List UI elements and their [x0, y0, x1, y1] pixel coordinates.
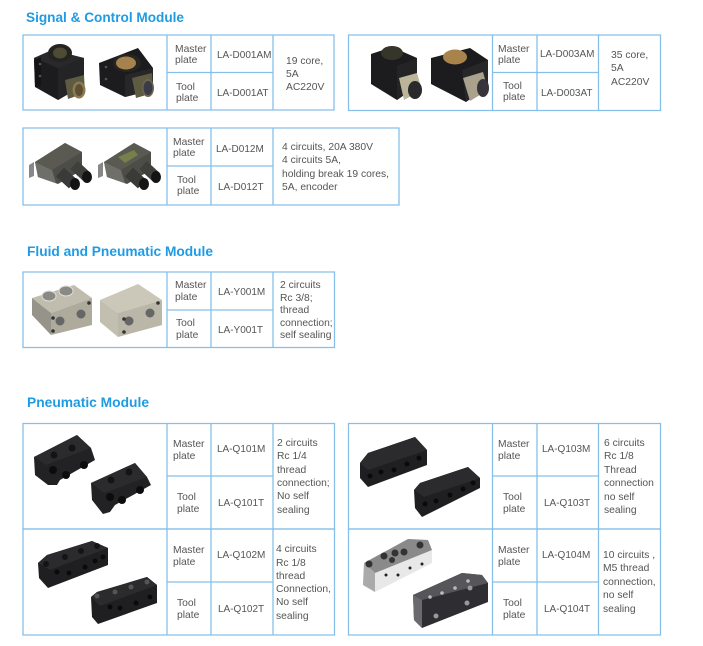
text: D012 labels: 4 circuits, 20A 380V: [282, 142, 373, 153]
text: Y001 labels: Tool: [176, 318, 195, 329]
text: D012 labels: holding break 19 cores,: [282, 169, 389, 180]
text: D003 labels: [498, 44, 649, 103]
text: Q102 labels: 4 circuits: [276, 544, 317, 555]
text: D012 labels: plate: [173, 148, 196, 159]
text: Q101 labels: LA-Q101M: [217, 444, 265, 455]
icon: Y001 tool block: [100, 284, 162, 337]
icon: Q102 master block: [38, 541, 108, 588]
text: Y001 labels: LA-Y001M: [218, 287, 265, 298]
text: D012 labels: Tool: [177, 175, 196, 186]
text: Y001 labels: LA-Y001T: [218, 325, 263, 336]
text: D001 labels: Master: [175, 44, 207, 55]
text: Y001 labels: Master: [175, 280, 207, 291]
text: Q103 labels: no self: [604, 492, 634, 503]
text: Q103 labels: LA-Q103M: [542, 444, 590, 455]
text: Q104 labels: no self: [603, 590, 633, 601]
icon: Q102 tool block: [91, 577, 157, 624]
text: Q103 labels: sealing: [604, 505, 637, 516]
text: Q101 labels: No self: [277, 491, 309, 502]
text: D003 labels: plate: [498, 55, 521, 66]
icon: Q101 master block: [34, 435, 95, 485]
text: Q103 labels: 6 circuits: [604, 438, 645, 449]
text: Q102 labels: sealing: [276, 611, 309, 622]
text: Q102 labels: [173, 544, 331, 622]
text: Q101 labels: connection;: [277, 478, 330, 489]
text: D003 labels: LA-D003AT: [541, 88, 593, 99]
heading: Pneumatic Module: Pneumatic Module: [27, 394, 149, 410]
text: D003 labels: 35 core,: [611, 50, 648, 61]
text: Q102 labels: Rc 1/8: [276, 558, 306, 569]
text: Q101 labels: LA-Q101T: [218, 498, 264, 509]
text: Q103 labels: Thread: [604, 465, 637, 476]
panel: LA-D003: [348, 35, 660, 110]
text: D001 labels: LA-D001AT: [217, 88, 269, 99]
text: Q102 labels: plate: [173, 557, 196, 568]
text: Y001 labels: Rc 3/8;: [280, 293, 313, 304]
text: Y001 labels: plate: [176, 330, 199, 341]
text: Q103 labels: LA-Q103T: [544, 498, 590, 509]
text: D012 labels: 5A, encoder: [282, 182, 338, 193]
text: D012 labels: 4 circuits 5A,: [282, 155, 341, 166]
text: Q101 labels: plate: [177, 504, 200, 515]
panel: LA-D012: [23, 128, 399, 205]
icon: Q103 master block: [360, 437, 427, 487]
panel: LA-D001: [23, 35, 334, 110]
text: Q104 labels: LA-Q104M: [542, 550, 590, 561]
text: Q103 labels: Rc 1/8: [604, 451, 634, 462]
text: D012 labels: LA-D012M: [216, 144, 264, 155]
text: D003 labels: plate: [503, 92, 526, 103]
text: Q104 labels: plate: [498, 557, 521, 568]
text: D003 labels: AC220V: [611, 77, 649, 88]
text: Q101 labels: Master: [173, 439, 205, 450]
text: D001 labels: [175, 44, 324, 104]
text: Q103 labels: Tool: [503, 492, 522, 503]
text: D001 labels: Tool: [176, 82, 195, 93]
icon: Y001 master block: [32, 285, 92, 335]
text: Q101 labels: [173, 438, 330, 516]
text: Q104 labels: sealing: [603, 604, 636, 615]
text: Q102 labels: Tool: [177, 598, 196, 609]
panel: LA-Y001: [23, 272, 334, 348]
text: D003 labels: LA-D003AM: [540, 49, 594, 60]
text: D003 labels: Master: [498, 44, 530, 55]
text: D003 labels: 5A: [611, 63, 624, 74]
icon: D012 tool connector: [98, 143, 161, 190]
panel: LA-Q102: [23, 529, 334, 635]
text: Q103 labels: Master: [498, 439, 530, 450]
text: Q104 labels: plate: [503, 610, 526, 621]
text: Q104 labels: [498, 545, 656, 621]
icon: D001 master connector: [34, 44, 86, 100]
text: D001 labels: AC220V: [286, 82, 324, 93]
text: Q102 labels: Connection,: [276, 584, 331, 595]
text: Q101 labels: thread: [277, 465, 306, 476]
text: Q101 labels: Tool: [177, 492, 196, 503]
panel: LA-Q101: [23, 424, 334, 529]
text: Q101 labels: Rc 1/4: [277, 451, 307, 462]
text: Q104 labels: M5 thread: [603, 563, 650, 574]
text: D001 labels: plate: [175, 55, 198, 66]
icon: D001 tool connector: [99, 48, 154, 98]
text: Q104 labels: 10 circuits ,: [603, 550, 655, 561]
text: D012 labels: plate: [177, 186, 200, 197]
text: Y001 labels: self sealing: [280, 330, 332, 341]
text: Q103 labels: [498, 438, 654, 516]
heading: Signal & Control Module: Signal & Control Module: [26, 9, 184, 25]
icon: Q104 master block: [363, 539, 432, 592]
text: Q103 labels: plate: [503, 504, 526, 515]
heading: Fluid and Pneumatic Module: Fluid and Pneumatic Module: [27, 243, 213, 259]
panel: LA-Q103: [348, 424, 660, 529]
text: D012 labels: [173, 137, 389, 197]
text: D003 labels: Tool: [503, 81, 522, 92]
text: Q104 labels: Tool: [503, 598, 522, 609]
text: Y001 labels: plate: [175, 292, 198, 303]
text: D012 labels: Master: [173, 137, 205, 148]
icon: Q103 tool block: [414, 467, 480, 517]
icon: D012 master connector: [29, 143, 92, 190]
text: Q102 labels: LA-Q102T: [218, 604, 264, 615]
text: Q104 labels: connection,: [603, 577, 656, 588]
text: Q104 labels: LA-Q104T: [544, 604, 590, 615]
text: D001 labels: plate: [176, 93, 199, 104]
icon: Q101 tool block: [91, 463, 151, 514]
text: Q102 labels: No self: [276, 597, 308, 608]
text: Q102 labels: plate: [177, 610, 200, 621]
icon: D003 master connector: [371, 46, 422, 100]
text: Q102 labels: thread: [276, 571, 305, 582]
text: Q101 labels: plate: [173, 451, 196, 462]
text: Y001 labels: thread: [280, 305, 309, 316]
text: Q101 labels: 2 circuits: [277, 438, 318, 449]
text: Q103 labels: plate: [498, 451, 521, 462]
text: Y001 labels: 2 circuits: [280, 280, 321, 291]
text: Q101 labels: sealing: [277, 505, 310, 516]
text: Q103 labels: connection: [604, 478, 654, 489]
text: D001 labels: 5A: [286, 69, 299, 80]
text: Q104 labels: Master: [498, 545, 530, 556]
text: Q102 labels: Master: [173, 545, 205, 556]
text: Y001 labels: connection;: [280, 318, 333, 329]
icon: D003 tool connector: [431, 48, 489, 102]
icon: Q104 tool block: [413, 573, 488, 628]
text: D001 labels: LA-D001AM: [217, 50, 271, 61]
text: D012 labels: LA-D012T: [218, 182, 264, 193]
text: Q102 labels: LA-Q102M: [217, 550, 265, 561]
panel: LA-Q104: [348, 529, 660, 635]
text: Y001 labels: [175, 280, 333, 341]
text: D001 labels: 19 core,: [286, 56, 323, 67]
